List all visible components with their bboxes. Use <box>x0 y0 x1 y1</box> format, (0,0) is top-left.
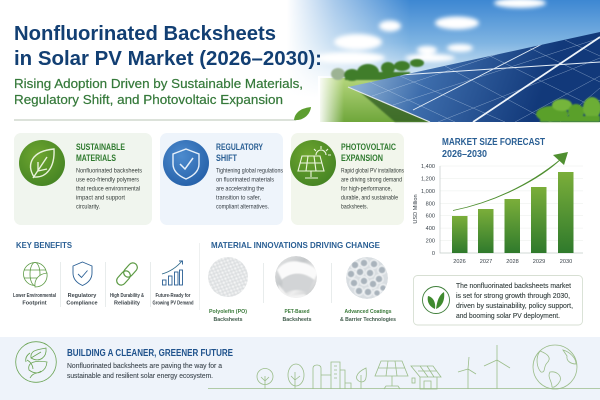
text: market outlook: and booming solar PV deployment. <box>456 313 560 320</box>
heading: key benefits: KEY BENEFITS <box>16 240 72 250</box>
icon: rising bars <box>162 261 182 285</box>
text: benefit labels: Lower Environmental <box>13 293 56 299</box>
text: material labels: Polyolefin (PO) <box>209 309 247 315</box>
text: benefit labels <box>13 293 194 306</box>
y axis labels <box>421 164 435 257</box>
x axis labels <box>453 259 572 265</box>
subtitle <box>14 77 303 107</box>
image: polyolefin pellets <box>208 257 248 297</box>
text: photovoltaic expansion body: durable, and sustainable <box>341 194 398 202</box>
x axis labels: 2030 <box>560 259 572 265</box>
heading: regulatory shift: REGULATORY <box>216 142 263 153</box>
footer banner <box>0 337 600 400</box>
text: market outlook: driven by sustainability, policy support, <box>456 303 573 310</box>
y axis title: USD Million <box>413 194 419 224</box>
icon: chain link <box>115 261 139 287</box>
title: in Solar PV Market (2026–2030): <box>14 48 322 70</box>
text: footer body: Nonfluorinated backsheets are paving the way for a <box>67 363 222 370</box>
panel: regulatory shift <box>160 133 283 225</box>
illustration: green skyline <box>208 345 600 389</box>
text: photovoltaic expansion body <box>341 168 404 210</box>
bars <box>452 172 574 253</box>
icon: shield check <box>73 262 92 286</box>
icon: leaf emblem <box>16 342 56 382</box>
text: material labels <box>209 309 396 323</box>
heading: market size forecast: MARKET SIZE FORECAST <box>442 136 545 148</box>
icon: sprout <box>422 286 450 314</box>
text: benefit labels: High Durability & <box>110 293 144 299</box>
text: regulatory shift body: Tightening global regulations <box>216 168 283 174</box>
y axis labels: 200 <box>426 239 435 245</box>
heading: regulatory shift: SHIFT <box>216 153 237 164</box>
text: regulatory shift body <box>216 168 283 210</box>
y axis labels: 400 <box>426 226 435 232</box>
heading: sustainable materials: MATERIALS <box>76 153 116 164</box>
icon: shield <box>163 140 209 186</box>
text: material labels: & Barrier Technologies <box>340 317 396 323</box>
heading: sustainable materials: SUSTAINABLE <box>76 142 125 153</box>
heading: regulatory shift <box>216 142 263 164</box>
text: footer body: sustainable and resilient solar energy ecosystem. <box>67 373 213 380</box>
text: benefit labels: Regulatory <box>68 293 97 299</box>
text: sustainable materials body: circularity. <box>76 204 100 210</box>
text: regulatory shift body: compliant alternatives. <box>216 204 269 210</box>
x axis labels: 2028 <box>506 259 519 265</box>
heading: market size forecast <box>442 136 545 160</box>
x axis labels: 2029 <box>533 259 545 265</box>
text: market outlook: is set for strong growth through 2030, <box>456 293 570 300</box>
subtitle: Regulatory Shift, and Photovoltaic Expansion <box>14 93 283 107</box>
text: benefit labels: Compliance <box>66 300 98 306</box>
heading: photovoltaic expansion <box>341 142 396 164</box>
y axis labels: 1,400 <box>421 164 435 170</box>
text: sustainable materials body <box>76 168 142 210</box>
panel: photovoltaic expansion <box>290 133 404 225</box>
text: sustainable materials body: use eco-friendly polymers <box>76 176 139 184</box>
y axis labels: 1,000 <box>421 189 435 195</box>
icon: leaf <box>19 140 65 186</box>
text: regulatory shift body: are accelerating the <box>216 186 264 192</box>
icon: globe with leaf <box>24 262 47 287</box>
heading: photovoltaic expansion: PHOTOVOLTAIC <box>341 142 396 153</box>
image: coating beads <box>346 257 388 299</box>
title rule with leaf <box>14 107 311 120</box>
hero photo: solar array in a green field <box>260 0 600 122</box>
text: material labels: PET-Based <box>284 309 310 315</box>
x axis labels: 2027 <box>480 259 492 265</box>
text: photovoltaic expansion body: are driving strong demand <box>341 176 402 184</box>
text: sustainable materials body: that reduce environmental <box>76 186 140 192</box>
text: photovoltaic expansion body: Rapid global PV installations <box>341 168 404 174</box>
title <box>14 23 322 70</box>
text: regulatory shift body: transition to safer, <box>216 194 261 202</box>
heading: sustainable materials <box>76 142 125 164</box>
y axis labels: 1,200 <box>421 176 435 182</box>
image: PET film <box>275 256 318 300</box>
text: regulatory shift body: on fluorinated materials <box>216 176 274 184</box>
bar chart: market size forecast <box>413 152 583 265</box>
heading: building a cleaner future: BUILDING A CLEANER, GREENER FUTURE <box>67 348 233 359</box>
subtitle: Rising Adoption Driven by Sustainable Materials, <box>14 77 303 91</box>
text: market outlook: The nonfluorinated backsheets market <box>456 283 571 290</box>
panel: sustainable materials <box>14 133 152 225</box>
text: market outlook <box>456 283 573 320</box>
heading: market size forecast: 2026–2030 <box>442 148 487 160</box>
callout: market outlook <box>414 276 582 325</box>
text: material labels: Backsheets <box>282 317 312 323</box>
x axis labels: 2026 <box>453 259 466 265</box>
heading: material innovations: MATERIAL INNOVATIONS DRIVING CHANGE <box>211 240 380 250</box>
title: Nonfluorinated Backsheets <box>14 23 276 45</box>
arrow: growth trend <box>453 152 568 210</box>
text: footer body <box>67 363 222 380</box>
text: photovoltaic expansion body: for high-performance, <box>341 186 392 192</box>
text: photovoltaic expansion body: backsheets. <box>341 204 368 210</box>
y axis labels: 0 <box>432 251 435 257</box>
y axis labels: 800 <box>426 201 435 207</box>
text: sustainable materials body: Nonfluorinated backsheets <box>76 168 142 174</box>
section: material innovations <box>199 240 396 323</box>
icon: solar panel and sun <box>290 140 336 186</box>
text: benefit labels: Reliability <box>114 300 141 306</box>
section: key benefits <box>13 240 194 307</box>
text: material labels: Backsheets <box>214 317 242 323</box>
text: sustainable materials body: impact and support <box>76 194 125 202</box>
y axis labels: 600 <box>426 214 435 220</box>
text: benefit labels: Growing PV Demand <box>152 300 194 306</box>
text: benefit labels: Footprint <box>22 300 47 306</box>
text: material labels: Advanced Coatings <box>344 309 392 315</box>
text: benefit labels: Future-Ready for <box>156 293 191 299</box>
heading: photovoltaic expansion: EXPANSION <box>341 153 383 164</box>
